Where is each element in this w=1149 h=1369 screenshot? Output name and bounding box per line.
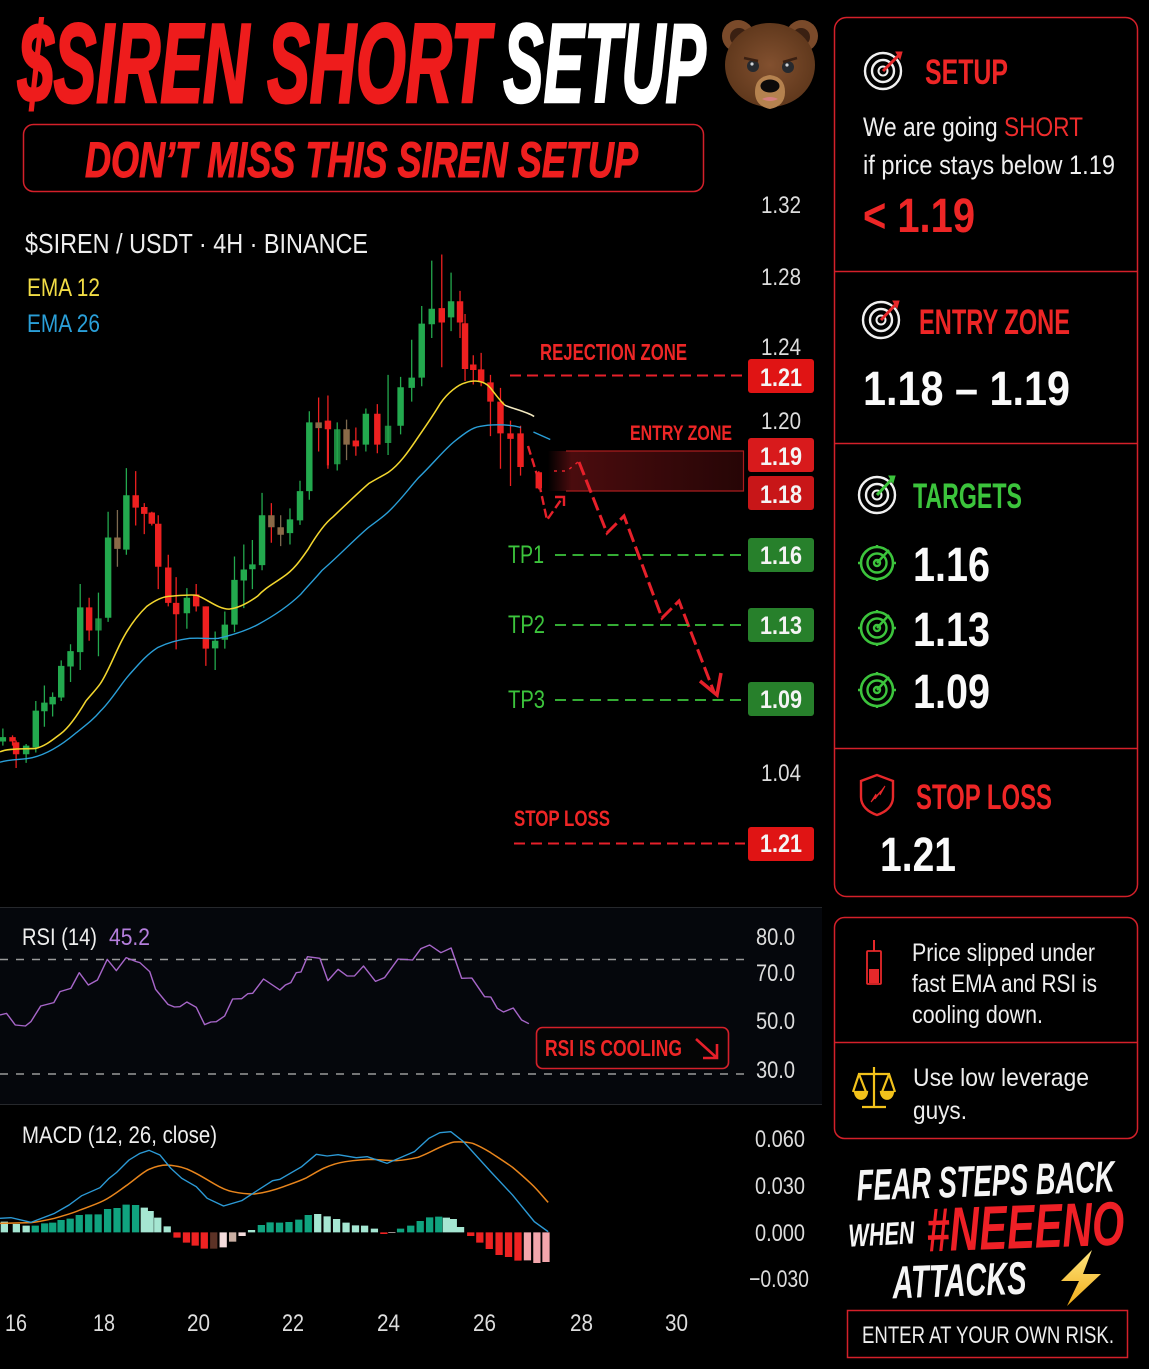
price axis labels: 1.28 — [761, 264, 801, 291]
text: leverage note: guys. — [913, 1097, 967, 1125]
rejection zone line: REJECTION ZONE — [540, 339, 687, 365]
text: setup description: if price stays below 1.19 — [863, 150, 1115, 180]
price tag: 1.09 — [748, 682, 814, 716]
price axis labels — [761, 192, 801, 787]
line: EMA 26 — [0, 425, 521, 762]
time axis labels: 24 — [377, 1310, 400, 1337]
take profit 3: TP3 — [508, 686, 545, 714]
time axis labels: 30 — [665, 1310, 688, 1337]
price axis labels: 1.20 — [761, 408, 801, 435]
risk disclaimer — [848, 1310, 1128, 1358]
price tag: 1.21 stop — [748, 827, 814, 861]
time axis labels: 26 — [473, 1310, 496, 1337]
text: price note — [912, 939, 1097, 1029]
subtitle banner: DON’T MISS THIS SIREN SETUP — [85, 132, 638, 188]
text: setup description: We are going SHORT — [863, 112, 1083, 142]
candlestick chart — [0, 254, 550, 768]
panel: trade plan — [834, 18, 1138, 896]
price tag: 1.21 rejection: 1.21 — [760, 364, 802, 392]
RSI heading: 45.2 — [109, 924, 150, 951]
target 1.09 — [858, 666, 990, 719]
price tag: 1.09: 1.09 — [760, 686, 802, 714]
MACD line — [0, 1132, 548, 1232]
panel: RSI — [0, 907, 822, 1104]
MACD signal line — [0, 1142, 548, 1223]
price tag: 1.13 — [748, 608, 814, 642]
price tag: 1.21 rejection — [748, 359, 814, 393]
target 1.16: 1.16 — [913, 539, 990, 592]
time axis labels: 18 — [93, 1310, 115, 1337]
text: leverage note — [913, 1064, 1089, 1125]
entry zone box — [548, 422, 744, 491]
MACD heading: MACD (12, 26, close) — [22, 1122, 217, 1149]
panel: notes — [834, 918, 1138, 1138]
time axis labels: 16 — [5, 1310, 27, 1337]
price tag: 1.19: 1.19 — [760, 443, 802, 471]
RSI axis labels: 50.0 — [756, 1008, 795, 1035]
icon: entry target — [863, 301, 899, 338]
slogan: ATTACKS — [891, 1252, 1028, 1308]
subtitle banner — [24, 124, 704, 192]
icon: red candle — [867, 940, 881, 984]
slogan: WHEN — [848, 1214, 916, 1254]
price tag: 1.16: 1.16 — [760, 542, 802, 570]
MACD axis labels: 0.030 — [755, 1173, 805, 1200]
take profit 2: TP2 — [508, 611, 545, 639]
title: SETUP — [503, 1, 706, 126]
take profit 1: TP1 — [508, 541, 544, 569]
price axis labels: 1.32 — [761, 192, 801, 219]
slogan — [848, 1152, 1125, 1308]
price tag: 1.21 stop: 1.21 — [760, 830, 802, 858]
time axis labels: 22 — [282, 1310, 304, 1337]
chart heading: $SIREN / USDT · 4H · BINANCE — [25, 228, 368, 259]
RSI axis labels: 70.0 — [756, 960, 795, 987]
projected path arrows — [528, 446, 721, 695]
RSI line — [0, 945, 529, 1026]
time axis labels: 28 — [570, 1310, 593, 1337]
line: EMA 12 — [0, 381, 505, 752]
heading: stop loss: STOP LOSS — [916, 778, 1052, 817]
heading: entry zone: ENTRY ZONE — [919, 303, 1070, 342]
icon: scales — [853, 1067, 895, 1107]
icon: setup target — [865, 52, 902, 89]
callout: RSI is cooling — [536, 1028, 728, 1068]
price axis labels: 1.04 — [761, 760, 801, 787]
value: below 1.19: < 1.19 — [863, 190, 975, 243]
RSI axis labels: 80.0 — [756, 924, 795, 951]
price tag: 1.13: 1.13 — [760, 612, 802, 640]
value: entry range: 1.18 – 1.19 — [863, 363, 1070, 416]
text: setup description — [863, 112, 1115, 180]
heading: targets: TARGETS — [913, 477, 1022, 516]
icon: shield — [861, 775, 893, 815]
target 1.13 — [858, 604, 990, 657]
text: price note: Price slipped under — [912, 939, 1095, 967]
price tag: 1.16 — [748, 538, 814, 572]
price axis labels: 1.24 — [761, 334, 801, 361]
heading: setup: SETUP — [925, 53, 1008, 92]
icon: targets — [859, 476, 895, 513]
callout: RSI is cooling: RSI IS COOLING — [545, 1035, 682, 1061]
text: price note: fast EMA and RSI is — [912, 970, 1097, 998]
price tag: 1.18 — [748, 476, 814, 510]
MACD histogram — [4, 1205, 546, 1263]
legend: EMA 26: EMA 26 — [27, 310, 100, 338]
MACD axis labels — [749, 1126, 809, 1293]
time axis labels — [5, 1310, 688, 1337]
text: leverage note: Use low leverage — [913, 1064, 1089, 1092]
RSI axis labels — [756, 924, 795, 1084]
MACD axis labels: 0.000 — [755, 1220, 805, 1247]
icon: lightning — [1061, 1250, 1101, 1306]
MACD axis labels: 0.060 — [755, 1126, 805, 1153]
title: $SIREN SHORT — [17, 1, 495, 126]
panel: MACD — [0, 1122, 809, 1293]
price tag: 1.19 — [748, 438, 814, 472]
time axis labels: 20 — [187, 1310, 210, 1337]
target 1.09: 1.09 — [913, 666, 990, 719]
target 1.13: 1.13 — [913, 604, 990, 657]
legend: EMA 12: EMA 12 — [27, 274, 100, 302]
text: price note: cooling down. — [912, 1001, 1043, 1029]
RSI heading — [22, 924, 150, 951]
RSI heading: RSI (14) — [22, 924, 97, 951]
price tag: 1.18: 1.18 — [760, 481, 802, 509]
MACD axis labels: −0.030 — [749, 1266, 809, 1293]
RSI axis labels: 30.0 — [756, 1057, 795, 1084]
stop loss line: STOP LOSS — [514, 806, 610, 831]
target 1.16 — [858, 539, 990, 592]
value: stop loss: 1.21 — [880, 829, 956, 882]
entry zone box: ENTRY ZONE — [630, 422, 732, 445]
icon: bear face — [722, 20, 818, 109]
